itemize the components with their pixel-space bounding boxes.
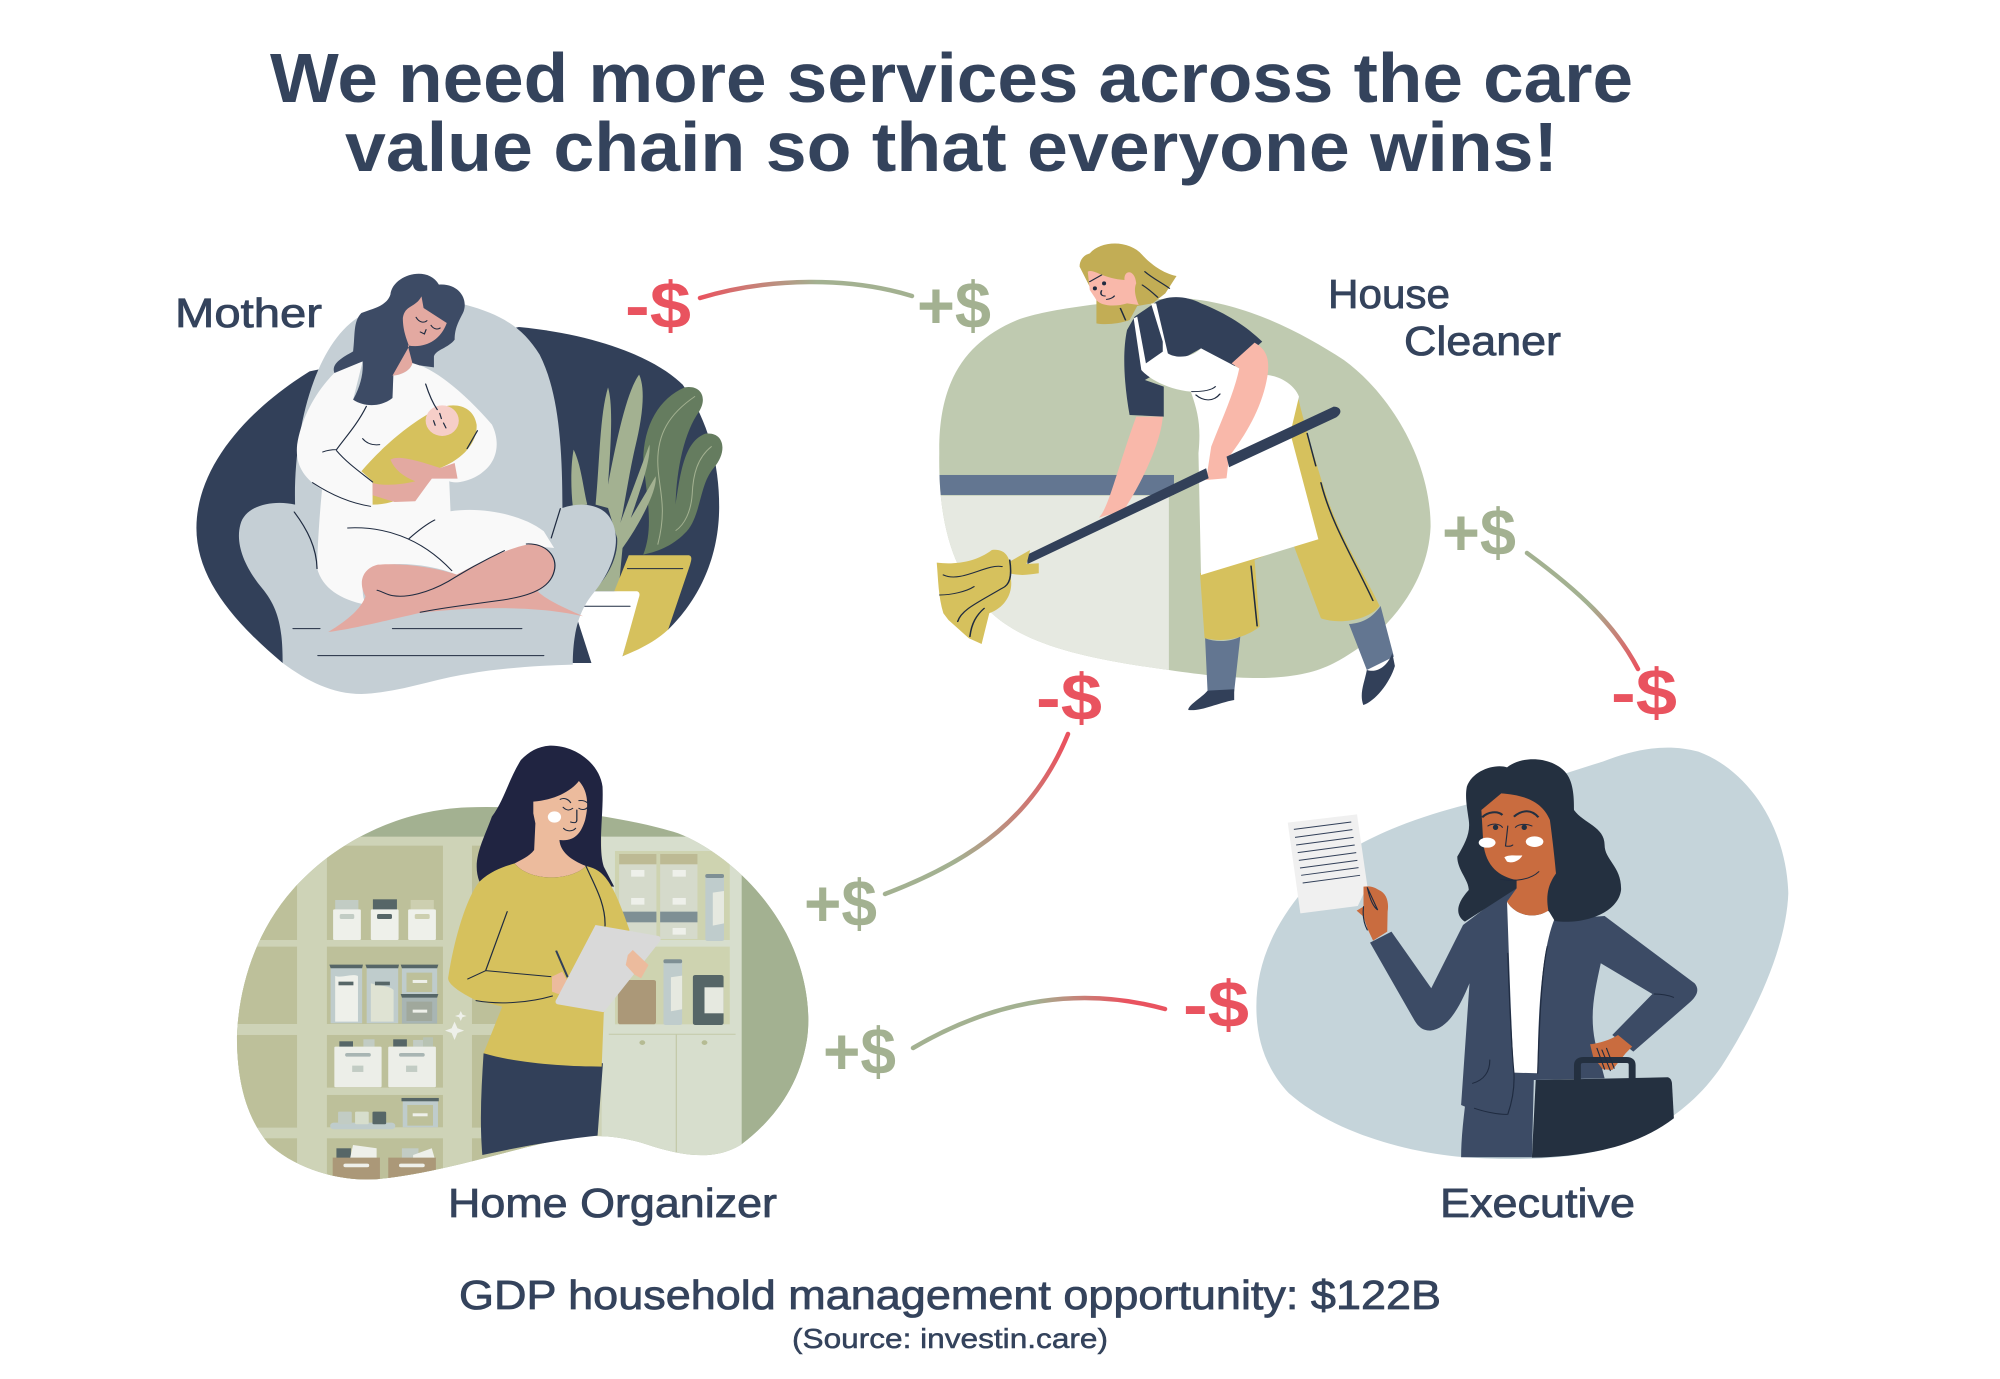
connector arrow: cleaner to organizer bbox=[885, 734, 1068, 894]
face details bbox=[548, 799, 588, 831]
label: House Cleaner: Cleaner bbox=[1404, 318, 1561, 364]
plus dollar: cleaner top: +$ bbox=[917, 268, 991, 342]
storage boxes right bbox=[618, 854, 724, 1025]
trousers bbox=[1200, 397, 1380, 640]
label: House Cleaner: House bbox=[1328, 271, 1450, 317]
clothing lines bbox=[1192, 387, 1373, 626]
sage background blob bbox=[237, 807, 808, 1180]
minus dollar: executive left: -$ bbox=[1183, 967, 1249, 1041]
illustration: house cleaner mopping bbox=[931, 244, 1431, 710]
face and neck bbox=[1481, 793, 1556, 915]
label: Executive: Executive bbox=[1440, 1180, 1635, 1226]
raised hand bbox=[1357, 886, 1388, 941]
baby in yellow blanket bbox=[361, 405, 477, 505]
infographic canvas bbox=[178, 52, 1788, 1354]
tray and canisters bbox=[330, 1098, 439, 1129]
hand on briefcase bbox=[1590, 1035, 1632, 1070]
boxes third row bbox=[334, 1037, 436, 1087]
arms and hands bbox=[373, 458, 458, 502]
illustration: mother nursing baby in armchair bbox=[196, 274, 722, 694]
suit lines bbox=[1473, 947, 1673, 1114]
illustration: home organizer with clipboard at pantry shelves bbox=[235, 746, 825, 1190]
hand, pen, clipboard bbox=[552, 925, 661, 1012]
kitchen counter bbox=[931, 475, 1174, 682]
crossed legs bbox=[328, 544, 583, 632]
connector arrow: cleaner to executive bbox=[1527, 553, 1638, 669]
jars left top row bbox=[333, 899, 436, 940]
skirt bbox=[481, 1053, 603, 1155]
label: Home Organizer: Home Organizer bbox=[448, 1180, 777, 1226]
sparkles bbox=[445, 1011, 467, 1040]
mop bbox=[937, 407, 1340, 644]
title bbox=[270, 39, 1633, 186]
neck and face bbox=[392, 296, 447, 376]
connector arrow: organizer to executive bbox=[913, 998, 1165, 1048]
label: House Cleaner bbox=[1328, 271, 1561, 364]
socks and legs bbox=[1205, 606, 1394, 693]
right wall panel bbox=[742, 875, 808, 1144]
minus dollar: mother: -$ bbox=[625, 268, 691, 342]
hair bbox=[1457, 759, 1621, 922]
sage background blob bbox=[939, 298, 1431, 678]
garment and chair lines bbox=[293, 384, 560, 656]
plus dollar: organizer upper: +$ bbox=[804, 866, 877, 940]
title: We need more services across the care bbox=[270, 39, 1633, 117]
apron bbox=[1134, 303, 1318, 575]
pale blue background blob bbox=[1256, 748, 1788, 1159]
label: Mother: Mother bbox=[175, 290, 322, 336]
illustration: executive with document and briefcase bbox=[1256, 748, 1788, 1159]
document bbox=[1288, 814, 1367, 913]
footer: source: (Source: investin.care) bbox=[792, 1323, 1108, 1354]
minus dollar: executive top: -$ bbox=[1611, 655, 1677, 729]
suit bbox=[1370, 888, 1697, 1157]
face details bbox=[1479, 811, 1543, 880]
potted plant bbox=[571, 375, 722, 665]
plus dollar: organizer lower: +$ bbox=[823, 1014, 896, 1088]
hair bbox=[334, 274, 465, 405]
hair bbox=[477, 746, 614, 887]
sweater lines bbox=[468, 866, 605, 1003]
navy shirt bbox=[1124, 297, 1262, 417]
connector arrow: mother to cleaner bbox=[700, 282, 912, 298]
hair and face bbox=[1080, 244, 1177, 324]
baskets bottom bbox=[332, 1145, 436, 1180]
shoes bbox=[1188, 653, 1395, 710]
minus dollar: cleaner bottom: -$ bbox=[1036, 660, 1102, 734]
navy background blob bbox=[196, 327, 719, 663]
footer: GDP opportunity: GDP household management opportunity: $122B bbox=[459, 1272, 1441, 1318]
title: value chain so that everyone wins! bbox=[345, 108, 1558, 186]
white shirt bbox=[1507, 902, 1554, 1073]
containers second row bbox=[329, 965, 438, 1024]
briefcase bbox=[1532, 1060, 1674, 1158]
yellow sweater bbox=[448, 863, 629, 1067]
armchair bbox=[239, 305, 616, 694]
dress bbox=[297, 361, 554, 605]
plus dollar: cleaner right: +$ bbox=[1442, 495, 1516, 569]
pantry shelving bbox=[235, 837, 825, 1190]
arm holding mop bbox=[1206, 343, 1268, 480]
arm holding counter bbox=[1099, 417, 1163, 518]
face and neck bbox=[515, 781, 587, 877]
